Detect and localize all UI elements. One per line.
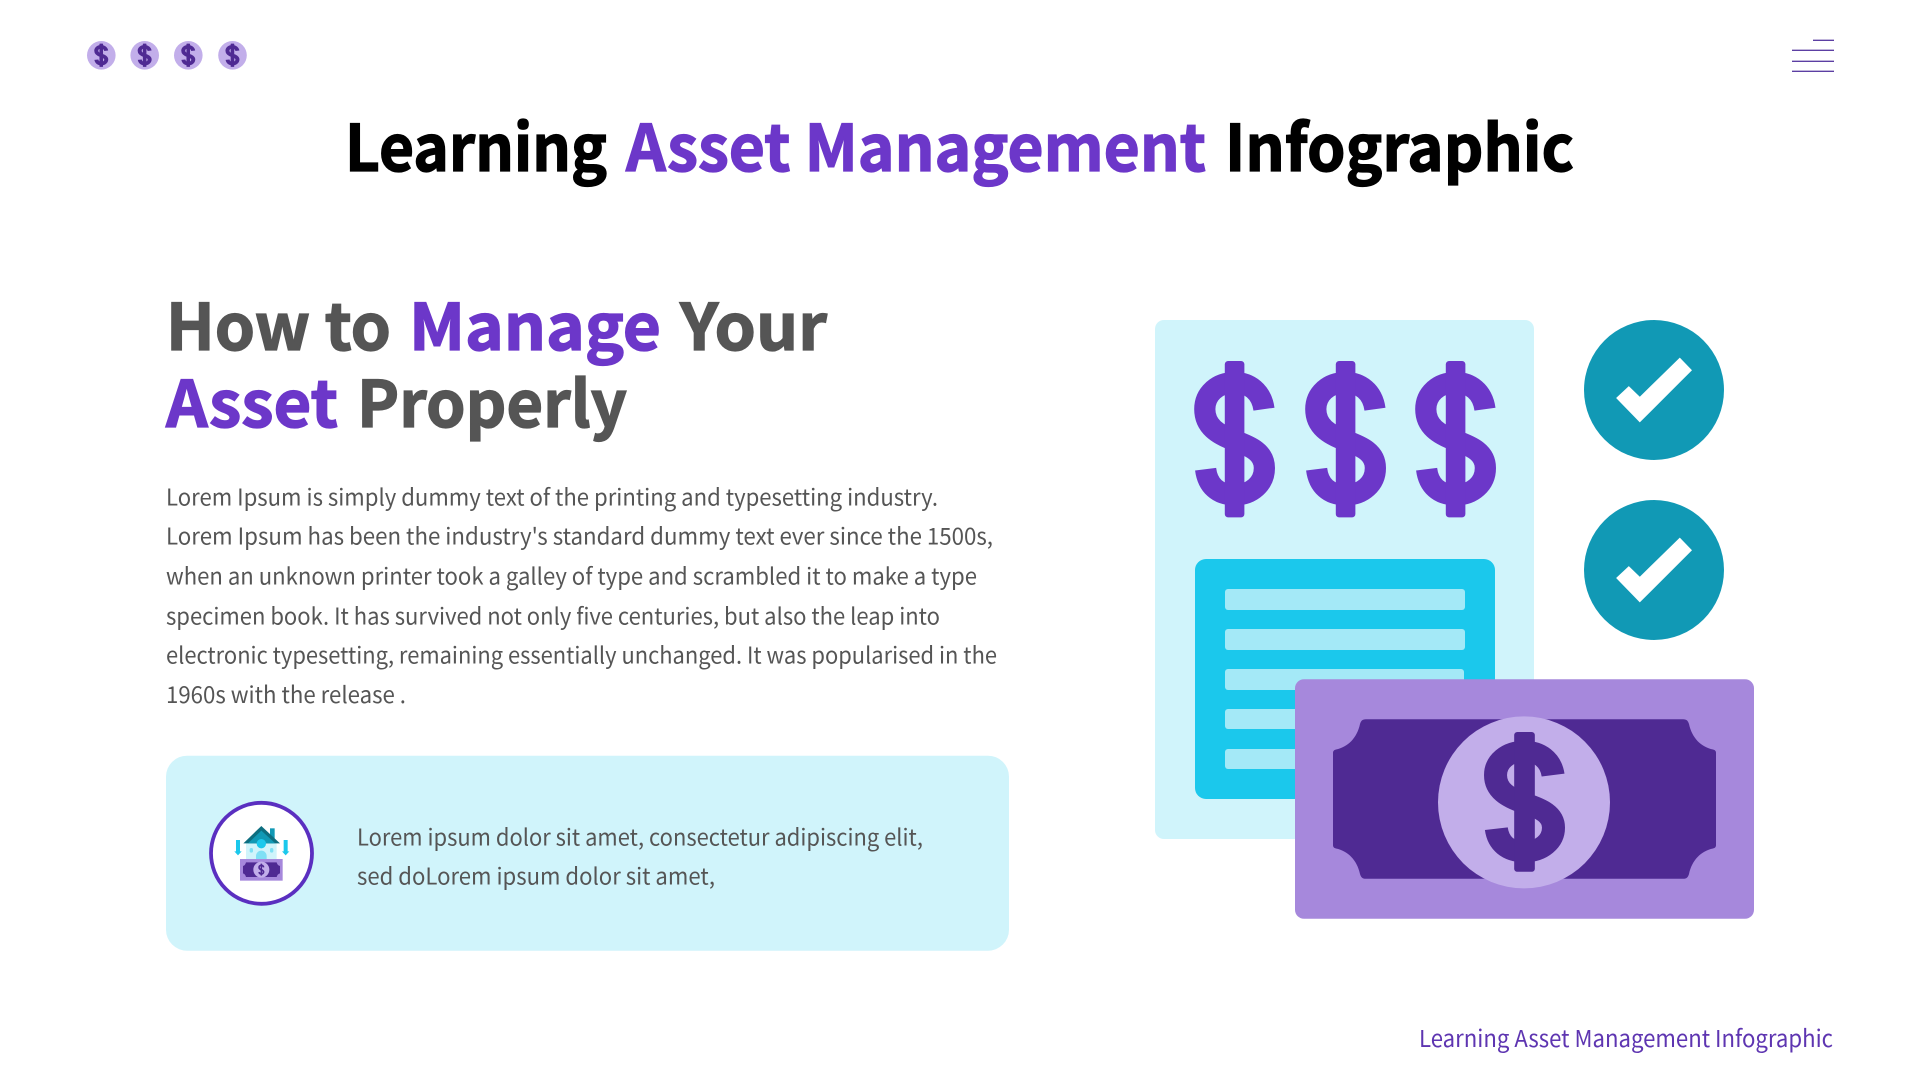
body paragraph: electronic typesetting, remaining essentially unchanged. It was popularised in the <box>166 636 997 670</box>
title <box>345 98 1574 190</box>
logo row: four dollar coins <box>87 41 247 70</box>
text block on document <box>1195 559 1495 799</box>
icon: house on banknote in circle <box>211 803 312 904</box>
heading: how to manage your asset properly: Asset <box>165 354 338 446</box>
panel: callout <box>166 756 1009 951</box>
icon: check badge 1 <box>1584 320 1724 460</box>
icon: menu lines <box>1792 40 1834 71</box>
heading: how to manage your asset properly: Your <box>679 277 827 369</box>
heading: how to manage your asset properly <box>165 277 827 446</box>
heading: how to manage your asset properly: How to <box>166 277 391 369</box>
icon: check badge 2 <box>1584 500 1724 640</box>
body paragraph: specimen book. It has survived not only five centuries, but also the leap into <box>166 598 940 632</box>
body paragraph: 1960s with the release . <box>166 676 406 710</box>
body paragraph: when an unknown printer took a galley of type and scrambled it to make a type <box>166 558 977 592</box>
heading: how to manage your asset properly: Properly <box>357 354 627 446</box>
banknote <box>1295 679 1754 919</box>
footer label: Learning Asset Management Infographic <box>1419 1020 1833 1054</box>
document <box>1155 320 1534 839</box>
title: Infographic <box>1225 98 1574 190</box>
heading: how to manage your asset properly: Manage <box>409 277 661 369</box>
body paragraph: Lorem Ipsum has been the industry's standard dummy text ever since the 1500s, <box>166 518 993 552</box>
icon: dollar sign on coin <box>1496 732 1553 872</box>
title: Asset Management <box>625 98 1206 190</box>
body paragraph <box>166 478 997 710</box>
illustration: document, checks and banknote <box>1155 320 1754 919</box>
callout text <box>357 818 923 892</box>
callout text: Lorem ipsum dolor sit amet, consectetur adipiscing elit, <box>357 818 923 852</box>
icon: three dollar signs <box>1205 361 1485 517</box>
callout text: sed doLorem ipsum dolor sit amet, <box>357 858 715 892</box>
body paragraph: Lorem Ipsum is simply dummy text of the printing and typesetting industry. <box>166 478 938 512</box>
title: Learning <box>345 98 607 190</box>
